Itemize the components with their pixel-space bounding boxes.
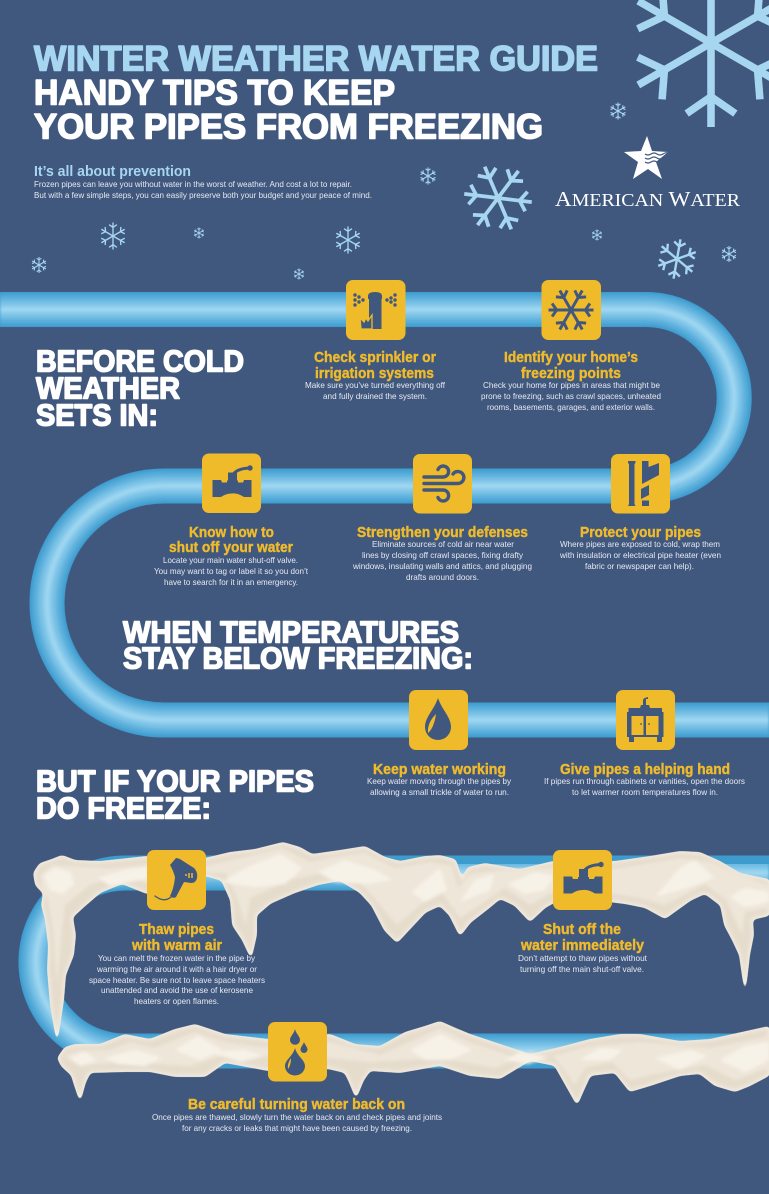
body text: If pipes run through cabinets or vanities, open the doors [544,776,745,786]
icon: tiny snowflake [419,168,437,184]
body text: unattended and avoid the use of kerosene [101,985,253,995]
tip: thaw pipes [89,850,265,1006]
heading: Protect your pipes [580,525,701,541]
icon: large snowflake [626,0,769,127]
title: YOUR PIPES FROM FREEZING [34,108,543,146]
body text: Locate your main water shut-off valve. [163,555,298,565]
body text: Keep water moving through the pipes by [367,776,512,786]
body text [152,1112,442,1133]
body text: You can melt the frozen water in the pipe by [98,953,256,963]
heading: Strengthen your defenses [357,525,528,541]
body text [559,539,721,571]
body text [352,539,532,582]
heading [504,350,638,382]
intro text: It’s all about prevention [34,163,191,180]
icon: tiny snowflake [193,228,205,238]
ice: upper band with icicles [34,843,769,1040]
body text: Eliminate sources of cold air near water [372,539,514,549]
body text [305,380,446,401]
heading: Give pipes a helping hand [560,762,730,778]
section heading: but if your pipes do freeze: BUT IF YOUR PIPES [36,764,314,798]
heading [314,350,436,382]
logo wordmark: AMERICAN WATER [555,187,740,211]
icon: tiny snowflake [31,257,47,273]
heading: water immediately [520,938,644,954]
title [34,40,598,146]
body text [89,953,265,1006]
tip: identify freezing points [481,279,661,412]
body text: and fully drained the system. [323,391,427,401]
heading [131,922,222,954]
icon: snowflake left [99,222,127,250]
tip: check sprinkler [305,280,446,401]
icon: cabinet [616,690,675,750]
tip: protect pipes [559,454,721,571]
body text: for any cracks or leaks that might have been caused by freezing. [182,1123,412,1133]
icon: wrapped pipes [611,454,670,514]
title: WINTER WEATHER WATER GUIDE [34,40,598,78]
heading: Be careful turning water back on [188,1097,405,1113]
tip: know how to shut off water [154,454,309,587]
icon: star with waves [624,136,668,179]
icon: valve [202,454,261,513]
heading: Keep water working [373,762,506,778]
body text: prone to freezing, such as crawl spaces, unheated [481,391,661,401]
heading: with warm air [131,938,222,954]
icon: snowflake tile [540,279,602,341]
heading: freezing points [521,366,621,382]
intro text [34,163,372,200]
body text [481,380,661,412]
body text: have to search for it in an emergency. [164,577,298,587]
section heading: when temperatures stay below freezing [123,614,473,676]
tip: shut off the water [518,850,648,974]
body text [367,776,512,797]
icon: valve [553,850,612,910]
body text [544,776,745,797]
pipe: upper serpentine [0,310,769,720]
section heading: before cold weather: BEFORE COLD [36,344,244,378]
body text: space heater. Be sure not to leave space heaters [89,975,265,985]
body text: Where pipes are exposed to cold, wrap them [560,539,720,549]
body text: Once pipes are thawed, slowly turn the water back on and check pipes and joints [152,1112,442,1122]
body text [518,953,648,974]
icon: tiny snowflake [609,102,627,120]
body text: Make sure you’ve turned everything off [305,380,446,390]
body text [154,555,309,587]
title: HANDY TIPS TO KEEP [34,74,395,112]
body text: Don’t attempt to thaw pipes without [518,953,648,963]
heading: Shut off the [543,922,621,938]
body text: drafts around doors. [406,572,479,582]
body text: You may want to tag or label it so you don’t [154,566,309,576]
body text: allowing a small trickle of water to run. [370,787,509,797]
intro text: Frozen pipes can leave you without water in the worst of weather. And cost a lot to repair. [34,179,352,189]
heading: Identify your home’s [504,350,638,366]
body text: to let warmer room temperatures flow in. [572,787,718,797]
icon: tiny snowflake [721,246,737,262]
heading [169,525,293,556]
pipe: frozen serpentine [36,873,769,1051]
body text: lines by closing off crawl spaces, fixing drafty [362,550,524,560]
tip: strengthen defenses [352,454,532,582]
tip: be careful turning water back on [152,1022,442,1133]
snowflakes [31,0,769,282]
body text: warming the air around it with a hair dryer or [96,964,257,974]
heading: Check sprinkler or [314,350,436,366]
heading: Thaw pipes [139,922,214,938]
body text: with insulation or electrical pipe heater (even [559,550,721,560]
body text: rooms, basements, garages, and exterior walls. [487,402,655,412]
intro text: But with a few simple steps, you can easily preserve both your budget and your peace of mind. [34,190,372,200]
icon: tiny snowflake [591,230,603,240]
section heading: but if your pipes do freeze: DO FREEZE: [36,790,211,826]
ice: lower band with icicles [58,1022,769,1104]
icon: water drop [409,690,468,750]
icon: snowflake middle [334,226,362,254]
heading [520,922,644,954]
tip: give pipes a helping hand [544,690,745,797]
section heading: when temperatures stay below freezing: STAY BELOW FREEZING: [123,640,473,676]
body text: turning off the main shut-off valve. [520,964,644,974]
body text: fabric or newspaper can help). [585,561,694,571]
heading: irrigation systems [315,366,434,382]
section heading: before cold weather [36,344,244,432]
icon: tiny snowflake [293,268,305,280]
icon: wind [413,454,472,514]
heading: shut off your water [169,540,293,556]
icon: snowflake lower right [654,236,700,282]
body text: Check your home for pipes in areas that might be [483,380,660,390]
body text: heaters or open flames. [134,996,219,1006]
logo: American Water [555,136,740,211]
heading: Know how to [189,525,274,541]
section heading: but if your pipes do freeze [36,764,314,826]
tip: keep water working [367,690,512,797]
section heading: before cold weather: WEATHER [36,370,180,406]
icon: sprinkler [346,280,406,340]
icon: hair dryer [147,850,206,910]
section heading: before cold weather: SETS IN: [36,398,158,432]
section heading: when temperatures stay below freezing: WHEN TEMPERATURES [123,614,459,650]
icon: medium snowflake [450,150,546,246]
body text: windows, insulating walls and attics, and plugging [352,561,532,571]
icon: water drops [268,1022,327,1082]
